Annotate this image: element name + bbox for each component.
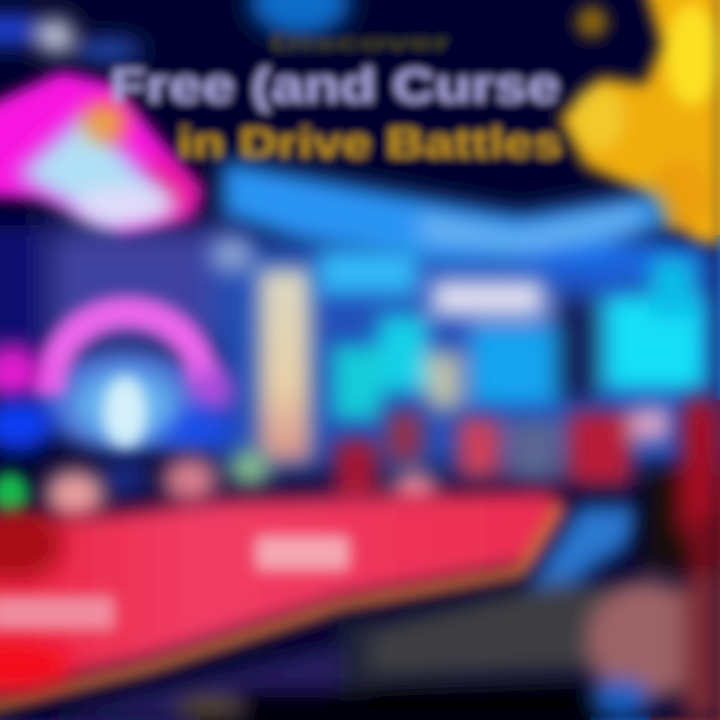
label: floor sign right: [255, 535, 350, 571]
panel: cyan tiles: [318, 250, 705, 420]
headline line two: in Drive Battles: [178, 119, 562, 166]
panel: rainbow arch: [0, 312, 235, 498]
panel: ground and blue edge: [40, 505, 640, 720]
label: floor sign left: [0, 596, 115, 630]
panel: right foreground figure: [585, 398, 720, 720]
subtitle line: Discover: [270, 30, 451, 55]
icon: green marker: [0, 473, 28, 517]
panel: blue ribbon: [222, 160, 705, 276]
panel: red seats row: [45, 408, 670, 521]
title: [110, 30, 562, 166]
headline line one: Free (and Curse: [110, 60, 560, 113]
panel: red floor: [0, 490, 565, 712]
top glow: blue badge: [0, 0, 350, 61]
panel: magenta triangle: [0, 72, 200, 232]
icon: gold star: [560, 0, 720, 245]
panel: beige pillar: [210, 237, 312, 463]
